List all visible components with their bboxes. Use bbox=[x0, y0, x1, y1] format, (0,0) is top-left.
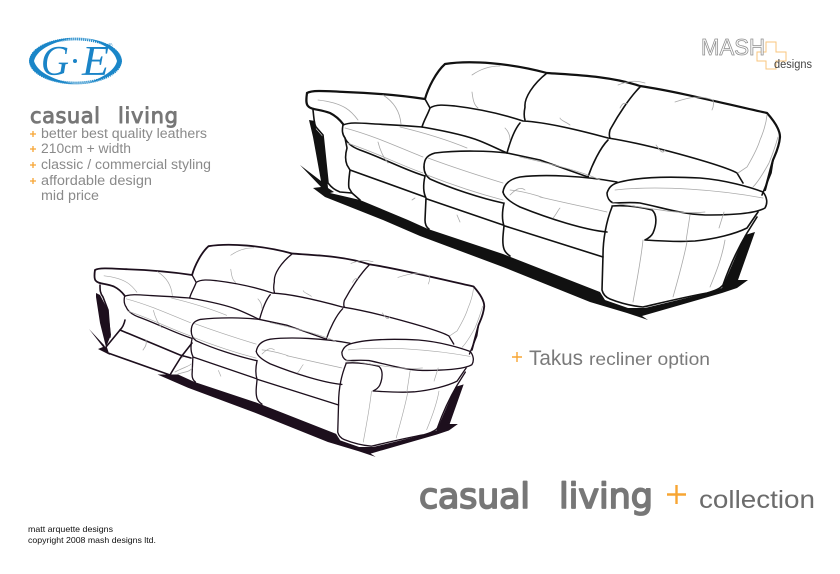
feature list: better best quality leathers bbox=[41, 126, 207, 141]
footer title: casual living collection: casual bbox=[419, 477, 530, 517]
footer title: casual living collection: living bbox=[559, 477, 653, 517]
logo: MASH designs: MASH bbox=[701, 34, 765, 60]
copyright credits bbox=[28, 524, 156, 545]
logo: G·E oval: E bbox=[81, 39, 109, 85]
cushions, back and right arm of large sofa bbox=[306, 62, 780, 320]
copyright credits: copyright 2008 mash designs ltd. bbox=[28, 535, 156, 545]
sofa: recliner option bbox=[89, 245, 484, 457]
feature list: mid price bbox=[41, 188, 99, 203]
callout: Takus recliner option: recliner option bbox=[589, 349, 710, 369]
feature list: affordable design bbox=[41, 173, 152, 188]
cushions, back and right arm of recliner sofa bbox=[94, 245, 484, 457]
copyright credits: matt arquette designs bbox=[28, 524, 113, 534]
sofa: large three-seater bbox=[300, 62, 780, 320]
logo: G·E oval bbox=[29, 38, 122, 85]
feature list bbox=[30, 126, 211, 203]
logo: MASH designs bbox=[701, 34, 812, 71]
logo: G·E oval: ® bbox=[108, 43, 113, 50]
callout: Takus recliner option: Takus bbox=[529, 347, 583, 370]
recliner footrest and left arm bbox=[89, 285, 192, 375]
heading: casual living: living bbox=[118, 104, 178, 128]
footer title: casual living collection bbox=[419, 477, 815, 517]
heading: casual living: casual bbox=[30, 104, 100, 128]
heading: casual living bbox=[30, 104, 178, 128]
feature list: 210cm + width bbox=[41, 141, 131, 156]
logo: G·E oval: G bbox=[41, 39, 69, 85]
feature list: classic / commercial styling bbox=[41, 157, 211, 172]
shadow and left arm of large sofa bbox=[300, 110, 425, 220]
footer title: casual living collection: collection bbox=[699, 486, 815, 514]
callout: Takus recliner option bbox=[512, 347, 710, 370]
logo: MASH designs: designs bbox=[774, 59, 812, 71]
